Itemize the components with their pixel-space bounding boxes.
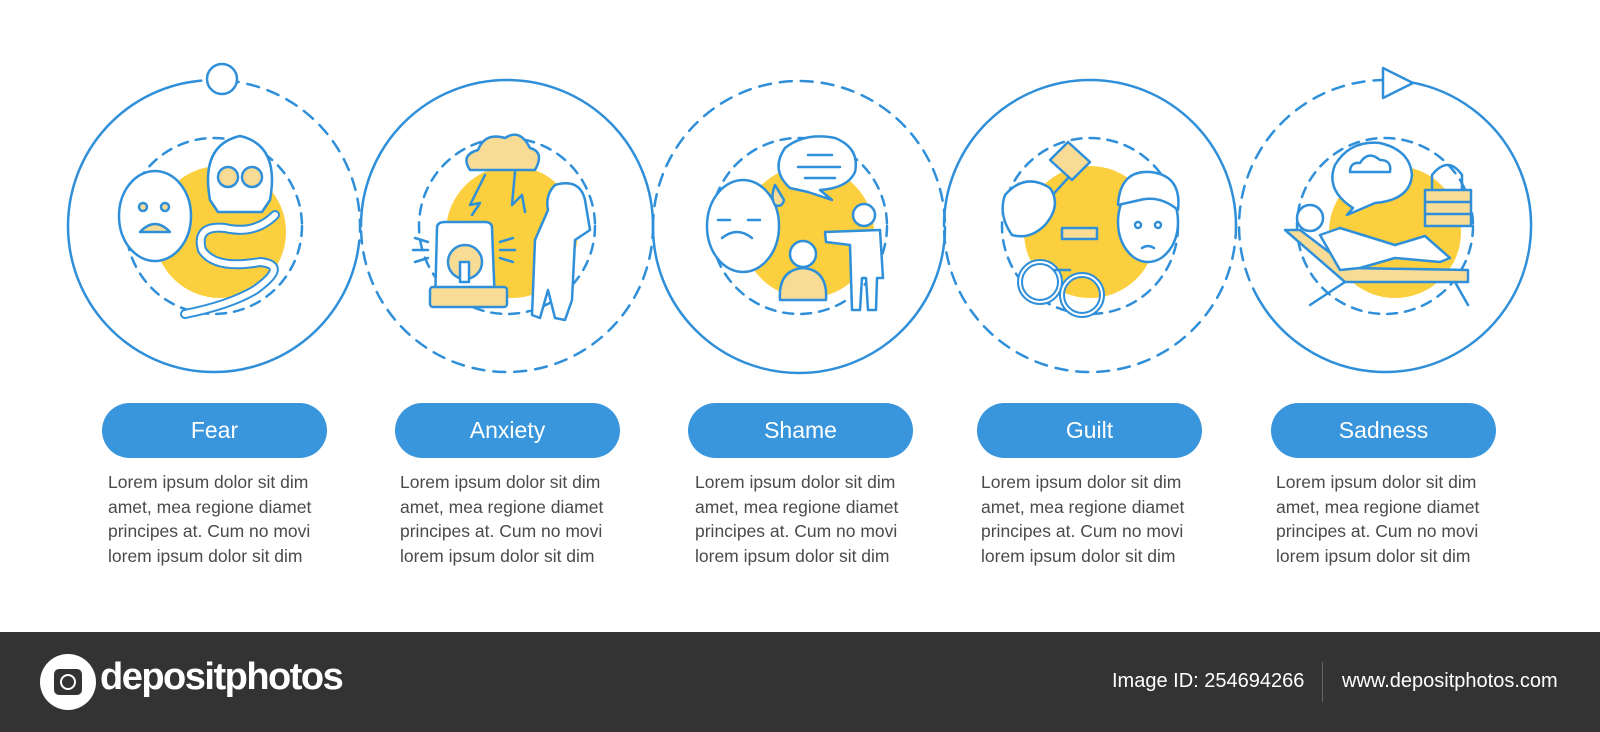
website: www.depositphotos.com [1342, 670, 1558, 692]
icon: skull [208, 136, 272, 212]
step 2 circle: anxiety [361, 80, 653, 372]
icon: stressed man [532, 183, 590, 320]
footer bar [0, 632, 1600, 732]
text: anxiety: Lorem ipsum dolor sit dim amet, mea regione diamet principes at. Cum no movi lorem ipsum dolor sit dim [400, 472, 603, 566]
label: Sadness [1271, 403, 1496, 458]
text: guilt: Lorem ipsum dolor sit dim amet, mea regione diamet principes at. Cum no movi lorem ipsum dolor sit dim [981, 472, 1184, 566]
icon: camera logo [40, 654, 96, 710]
icon: handcuffs [1020, 262, 1102, 315]
icon: siren [413, 222, 515, 307]
step 1 circle: fear [68, 64, 360, 372]
step 5 circle: sadness [1239, 68, 1531, 372]
icon: padlock [1425, 165, 1471, 226]
icon: gavel block [1062, 228, 1097, 239]
label: Anxiety [395, 403, 620, 458]
step 3 circle: shame [653, 81, 945, 373]
label: Anxiety: Anxiety [470, 417, 545, 443]
text: sadness: Lorem ipsum dolor sit dim amet, mea regione diamet principes at. Cum no movi lorem ipsum dolor sit dim [1276, 472, 1479, 566]
label: Guilt: Guilt [1066, 417, 1113, 443]
label: Sadness: Sadness [1339, 417, 1428, 443]
icon: storm cloud [466, 135, 539, 215]
arrow: triangle [1383, 68, 1413, 98]
text: shame: Lorem ipsum dolor sit dim amet, mea regione diamet principes at. Cum no movi lorem ipsum dolor sit dim [695, 472, 898, 566]
icon: speech bubble with rain [1332, 143, 1412, 215]
icon: pointing person [825, 204, 883, 310]
icon: hand with gavel [1003, 142, 1090, 236]
label: Fear: Fear [191, 417, 238, 443]
icon: snake [185, 215, 275, 314]
icon: speech bubble [779, 136, 856, 200]
label: Shame: Shame [764, 417, 837, 443]
step 4 circle: guilt [944, 80, 1236, 372]
label: Fear [102, 403, 327, 458]
icon: boy face [1118, 172, 1178, 262]
icon: scared face [119, 171, 191, 261]
icon: person on lounger [1285, 205, 1468, 305]
label: Guilt [977, 403, 1202, 458]
text: fear: Lorem ipsum dolor sit dim amet, mea regione diamet principes at. Cum no movi lorem ipsum dolor sit dim [108, 472, 311, 566]
image id: Image ID: 254694266 [1112, 670, 1304, 692]
icon: sad face with drop [707, 180, 784, 272]
icon: small person [780, 241, 826, 300]
logo text: depositphotos [100, 656, 342, 698]
diagram circles and icons [66, 62, 1532, 374]
label: Shame [688, 403, 913, 458]
